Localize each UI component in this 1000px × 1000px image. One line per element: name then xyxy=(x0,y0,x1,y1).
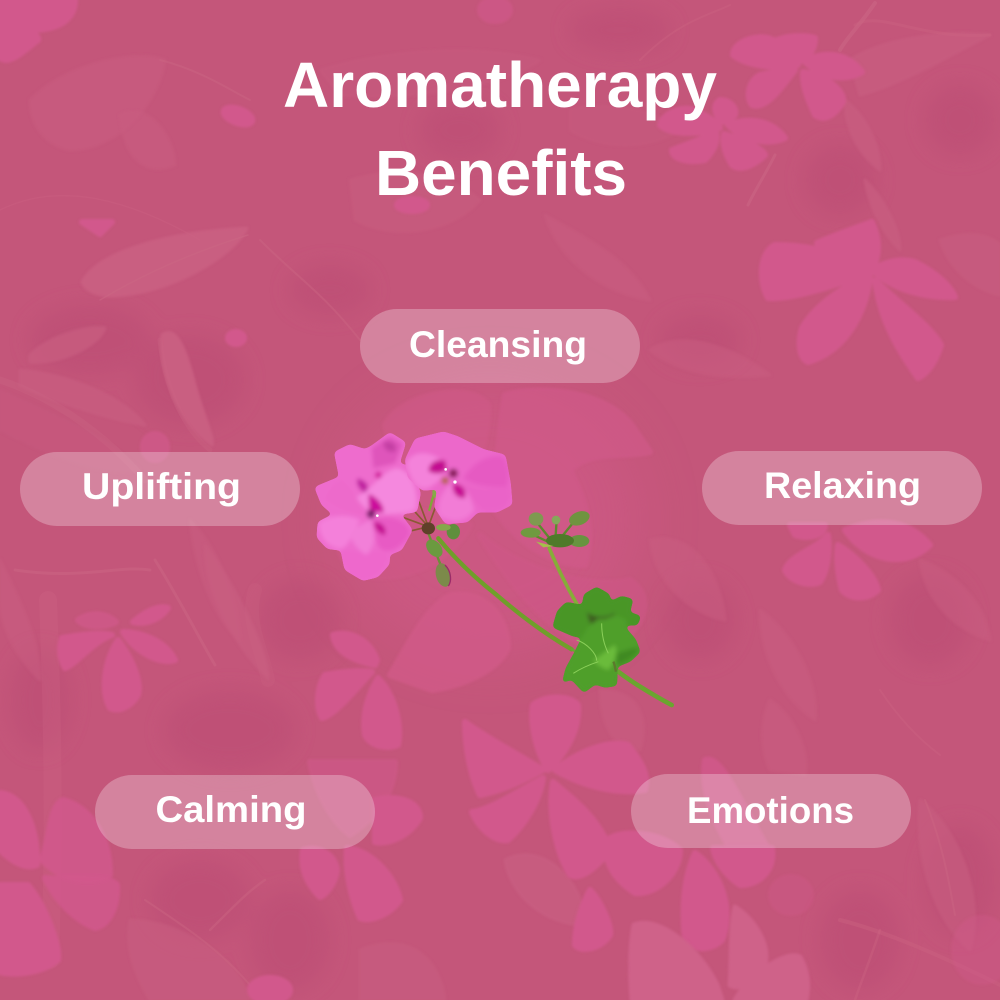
left flower xyxy=(317,435,418,578)
flower stamens xyxy=(376,468,457,517)
pill: Uplifting: Uplifting xyxy=(82,466,241,507)
flower lower centre left xyxy=(302,634,420,919)
pill: Cleansing xyxy=(360,309,640,383)
pill: Relaxing: Relaxing xyxy=(764,465,921,506)
stems xyxy=(397,490,672,705)
soft glow behind sprig xyxy=(340,385,640,655)
leaf veins xyxy=(573,623,616,673)
pill: Calming xyxy=(95,775,375,849)
small buds xyxy=(222,104,254,128)
pill: Relaxing xyxy=(702,451,982,525)
flower bottom left xyxy=(0,793,117,974)
title: Aromatherapy xyxy=(283,49,717,121)
pill: Emotions: Emotions xyxy=(687,790,854,831)
flower right of Emotions xyxy=(575,760,772,949)
title: Benefits xyxy=(375,137,627,209)
large pale petals at bottom xyxy=(631,907,808,1000)
right flower xyxy=(407,434,510,522)
flower near Emotions left xyxy=(465,698,646,876)
pill: Uplifting xyxy=(20,452,300,526)
flower below Relaxing xyxy=(785,522,930,598)
pill: Calming: Calming xyxy=(156,789,306,830)
centre flower xyxy=(335,391,650,690)
top left flower xyxy=(0,0,75,60)
flower near Relaxing xyxy=(762,222,955,378)
pill: Emotions xyxy=(631,774,911,848)
leaves xyxy=(554,588,639,692)
pill: Cleansing: Cleansing xyxy=(409,324,587,365)
sepals and buds xyxy=(422,487,592,588)
flower upper left of Calming xyxy=(60,607,175,709)
top right flowers xyxy=(660,36,862,168)
illustration: geranium sprig xyxy=(317,434,672,705)
title xyxy=(283,49,717,209)
